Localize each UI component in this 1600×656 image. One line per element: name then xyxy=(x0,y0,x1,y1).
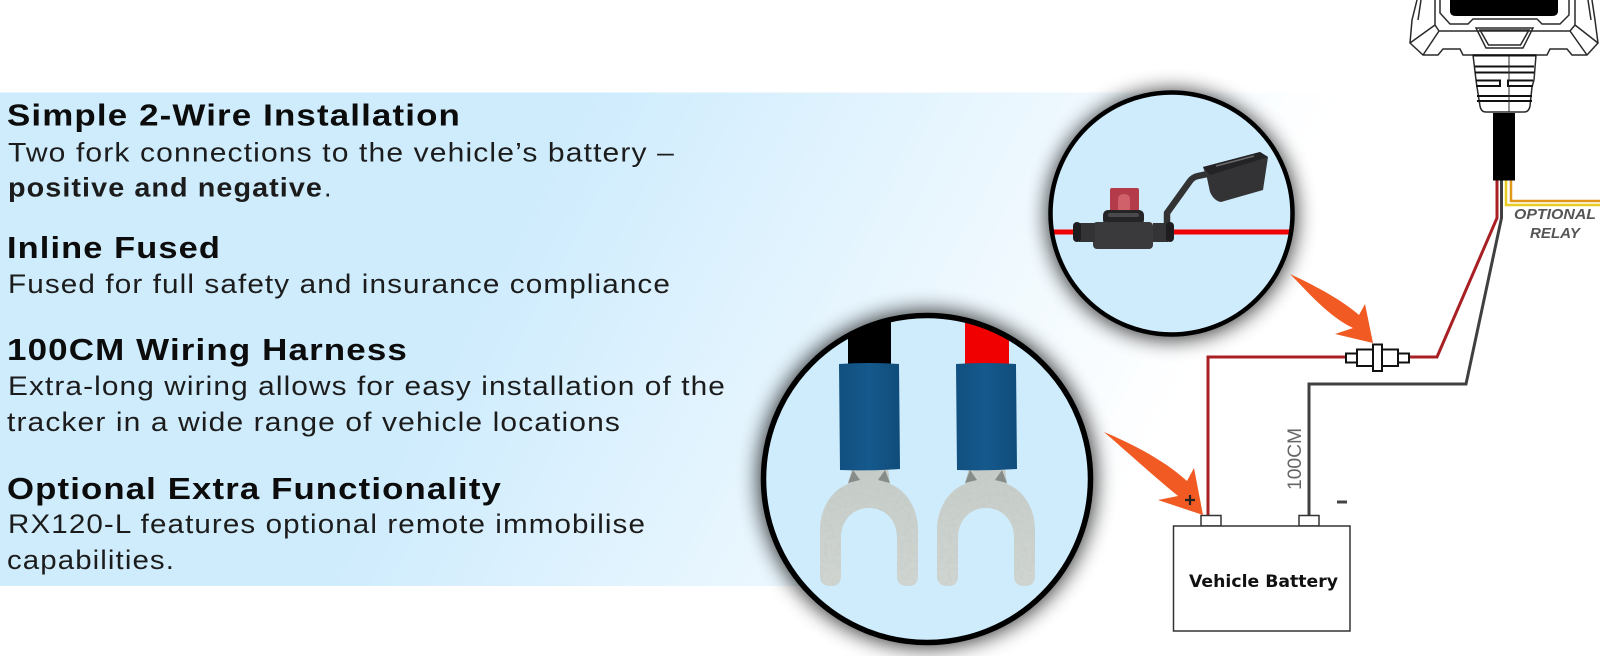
battery terminal positive xyxy=(1201,516,1221,526)
text: RX120-L features: capabilities. xyxy=(7,545,175,575)
device screen frame xyxy=(1440,0,1569,24)
black wire xyxy=(848,322,891,364)
label: optional relay: OPTIONAL xyxy=(1514,207,1596,223)
icon: inline fuse symbol xyxy=(1346,344,1409,371)
left blue sleeve xyxy=(839,363,900,470)
wire: yellow relay xyxy=(1506,180,1600,205)
vehicle battery xyxy=(1174,516,1350,631)
heading: Simple 2-Wire Installation: Simple 2-Wire Installation xyxy=(7,98,461,132)
text: two fork connections: positive and negative xyxy=(8,172,323,202)
red wire xyxy=(965,322,1009,364)
arrow: to inline fuse xyxy=(1290,274,1373,343)
wire: red positive xyxy=(1208,180,1497,515)
fuse red wire xyxy=(1050,230,1294,234)
panel: feature list background xyxy=(0,92,1344,586)
wire: orange relay xyxy=(1511,180,1600,201)
circle: inline fuse close-up xyxy=(1050,92,1294,334)
wiring diagram wires xyxy=(1208,180,1600,515)
text: RX120-L features xyxy=(7,509,646,575)
label: 100CM: 100CM xyxy=(1285,428,1306,490)
arrow: to positive terminal xyxy=(1104,432,1203,515)
fuse strap xyxy=(1167,173,1212,224)
heading: Optional Extra Functionality: Optional Extra Functionality xyxy=(7,471,502,506)
device body outline xyxy=(1410,0,1598,55)
device side grip lines xyxy=(1418,0,1591,20)
label: plus sign xyxy=(1185,495,1195,505)
fuse cap xyxy=(1203,152,1268,202)
text: extra-long wiring: Extra-long wiring allows for easy installation of the xyxy=(8,371,726,401)
heading: 100CM Wiring Harness: 100CM Wiring Harness xyxy=(7,332,408,367)
shadow: fork circle xyxy=(758,310,1096,648)
text: two fork connections: Two fork connections to the vehicle’s battery – xyxy=(8,138,675,168)
label: optional relay xyxy=(1514,207,1596,242)
battery body xyxy=(1174,526,1350,631)
fuse holder xyxy=(1073,210,1174,249)
label: optional relay: RELAY xyxy=(1530,226,1581,242)
device screen xyxy=(1450,0,1558,16)
connector boot xyxy=(1473,55,1536,112)
right blue sleeve xyxy=(956,363,1017,470)
text: extra-long wiring: tracker in a wide range of vehicle locations xyxy=(7,407,621,437)
device: tracker unit xyxy=(1410,0,1598,112)
text: fused for safety: Fused for full safety and insurance compliance xyxy=(8,269,671,299)
device bezel lines xyxy=(1410,0,1598,55)
feature list text xyxy=(7,98,726,575)
battery label: Vehicle Battery xyxy=(1189,572,1338,591)
circle: fork terminals close-up xyxy=(764,310,1090,642)
wire: black negative xyxy=(1309,180,1502,515)
cable sheath xyxy=(1493,113,1515,180)
fuse blade xyxy=(1110,188,1139,210)
battery terminal negative xyxy=(1299,516,1319,526)
heading: Inline Fused: Inline Fused xyxy=(7,230,221,265)
left fork terminal xyxy=(820,468,918,586)
text: two fork connections xyxy=(8,138,675,202)
text: extra-long wiring xyxy=(7,371,726,437)
text: RX120-L features: RX120-L features optional remote immobilise xyxy=(8,509,646,539)
device button xyxy=(1476,28,1533,48)
right fork terminal xyxy=(937,468,1035,586)
shadow: fuse circle xyxy=(1046,90,1296,340)
text: two fork connections: . xyxy=(324,172,333,202)
label: minus sign xyxy=(1337,500,1347,504)
